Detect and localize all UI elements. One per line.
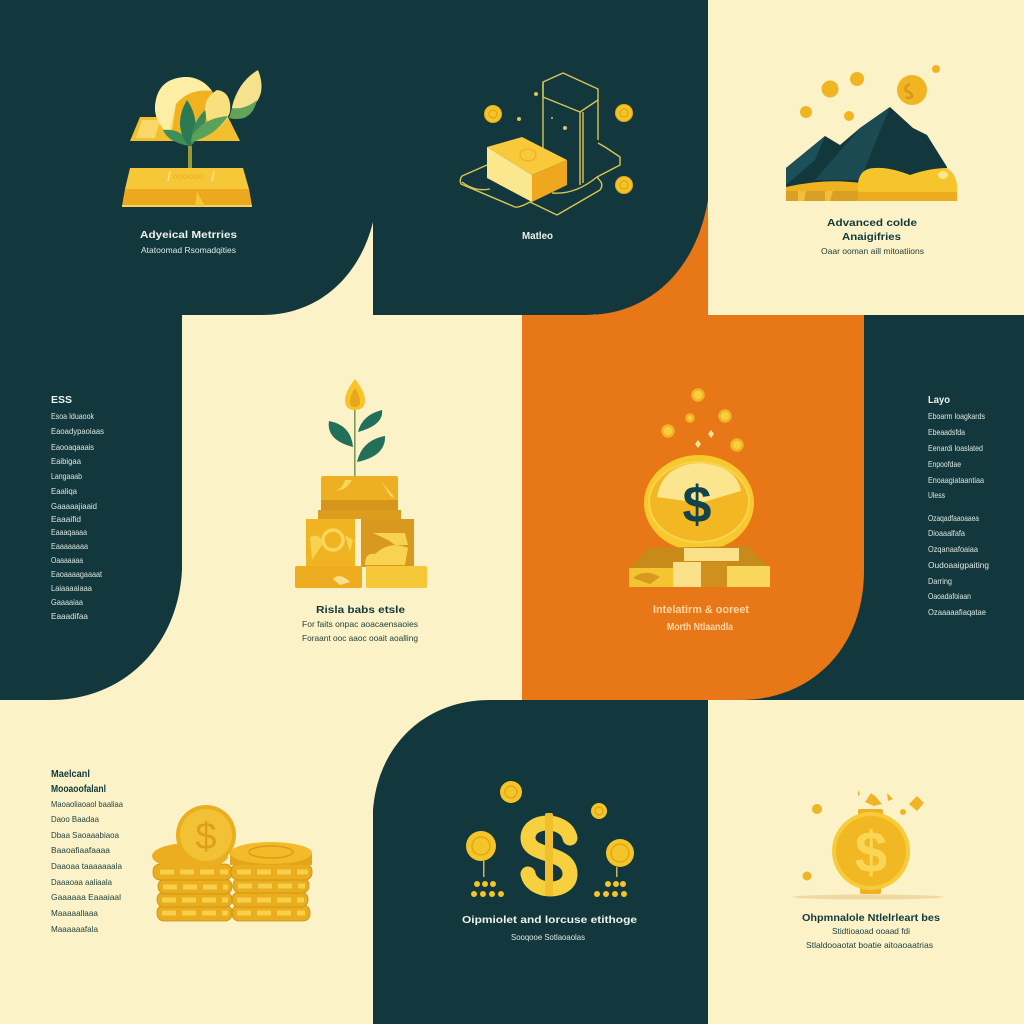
text block: left list: Laiaaaaiaaa xyxy=(51,583,92,593)
icon: dollar and coins xyxy=(466,781,634,897)
panel: top left dark xyxy=(0,0,373,315)
text block: left list xyxy=(51,411,104,621)
text block: right list: Eboarm Ioagkards xyxy=(928,411,985,421)
heading: bottom right: Ohpmnalole Ntlelrleart bes xyxy=(802,913,940,924)
heading: top left: Adyeical Metrries xyxy=(140,230,238,241)
caption: orange panel: Morth Ntlaandla xyxy=(667,622,733,633)
text block: left list: Eaoaaaagaaaat xyxy=(51,569,103,579)
icon: gold bar with sprout xyxy=(122,70,262,207)
text block: left list: Gaaaaajiaaid xyxy=(51,501,97,511)
text block: left list: Eaaaaaaaa xyxy=(51,541,88,551)
heading: top right: Advanced colde xyxy=(827,218,917,229)
heading: orange panel: Intelatirm & ooreet xyxy=(653,604,749,616)
heading: top right xyxy=(827,218,917,243)
text block: bottom right: Stlaldooaotat boatie aitoaoaatrias xyxy=(806,940,933,950)
icon: coin with sparkles xyxy=(793,790,943,900)
text block: bottom left list xyxy=(51,799,123,934)
panel: center cream xyxy=(182,315,522,700)
panel: top middle dark xyxy=(373,0,708,315)
text block: right list: Enpoofdae xyxy=(928,459,961,469)
panel: bottom middle dark xyxy=(373,700,708,1024)
heading: top middle: Matleo xyxy=(522,231,553,242)
text block: right list: Oaoadafoiaan xyxy=(928,591,971,601)
text block: bottom left list: Maaaaallaaa xyxy=(51,908,98,918)
text block: center xyxy=(302,619,418,643)
heading: bottom left list: Maelcanl xyxy=(51,769,90,780)
text block: left list: Langaaab xyxy=(51,471,82,481)
text block: bottom left list: Daaaoaa aaliaala xyxy=(51,877,112,887)
text block: left list: Esoa Iduaook xyxy=(51,411,95,421)
caption: bottom middle: Sooqooe Sotlaoaolas xyxy=(511,932,585,942)
text block: left list: Eaaadifaa xyxy=(51,611,88,621)
text block: left list: Eaibigaa xyxy=(51,456,81,466)
text block: left list: Eaaaqaaaa xyxy=(51,527,87,537)
panel: bottom left xyxy=(51,769,312,934)
dollar sign: $ xyxy=(683,476,712,534)
text block: right list: Ozaqadfaaoaaea xyxy=(928,513,979,523)
text block: left list: Oaaaaaaa xyxy=(51,555,83,565)
text block: left list: Eaooaqaaais xyxy=(51,442,94,452)
heading: bottom left list: Mooaoofalanl xyxy=(51,784,106,795)
text block: right list: Enoaagiataantiaa xyxy=(928,475,984,485)
text block: right list: Darring xyxy=(928,576,952,586)
icon: gold bars with sprout xyxy=(295,379,427,588)
text block: bottom left list: Daoo Baadaa xyxy=(51,814,99,824)
heading: bottom middle: Oipmiolet and lorcuse etithoge xyxy=(462,915,638,926)
text block: bottom left list: Daaoaa taaaaaaala xyxy=(51,861,122,871)
text block: right list: Uless xyxy=(928,490,945,500)
caption: top left: Atatoomad Rsomadqities xyxy=(141,245,236,255)
panel: top right xyxy=(708,0,1024,315)
caption: top right: Oaar ooman aill mitoatiions xyxy=(821,246,924,256)
text block: bottom left list: Baaoafiaafaaaa xyxy=(51,845,110,855)
heading: layout list: Layo xyxy=(928,395,950,406)
panel: right list background xyxy=(700,315,1024,700)
text block: center: Foraant ooc aaoc ooait aoalling xyxy=(302,633,418,643)
text block: bottom left list: Maoaoliaoaol baaliaa xyxy=(51,799,123,809)
text block: right list: Ebeaadsfda xyxy=(928,427,965,437)
icon: coin stacks xyxy=(152,805,312,921)
icon: coin stacks: $ xyxy=(195,816,217,858)
text block: left list: Eaaliqa xyxy=(51,486,77,496)
heading: ESS: ESS xyxy=(51,395,72,406)
text block: right list: Ozqanaafoaiaa xyxy=(928,544,978,554)
text block: bottom left list: Gaaaaaa Eaaaiaal xyxy=(51,892,121,902)
icon: gold block with wireframe xyxy=(460,73,632,215)
text block: left list: Gaaaaiaa xyxy=(51,597,83,607)
panel: bottom right xyxy=(793,790,943,950)
icon: mountains with coins xyxy=(786,65,957,201)
text block: left list: Eaoadypaoiaas xyxy=(51,426,104,436)
text block: right list: Eenardi Ioaslated xyxy=(928,443,983,453)
text block: right list: Dioaaalfafa xyxy=(928,528,965,538)
text block: right list: Oudoaaigpaiting xyxy=(928,560,989,570)
text block: right list: Ozaaaaafiaqatae xyxy=(928,607,986,617)
text block: bottom right xyxy=(806,926,933,950)
text block: bottom left list: Maaaaaafala xyxy=(51,924,98,934)
icon: coin on gold bars xyxy=(629,390,770,587)
icon: gold bar with sprout: 000000 xyxy=(173,174,204,181)
text block: left list: Eaaaifid xyxy=(51,514,81,524)
text block: bottom right: Stidtioaoad ooaad fdi xyxy=(832,926,910,936)
heading: top right: Anaigifries xyxy=(842,232,901,243)
heading: center: Risla babs etsle xyxy=(316,605,406,616)
heading: bottom left list xyxy=(51,769,106,795)
icon: coin with sparkles: $ xyxy=(855,820,887,885)
text block: center: For faits onpac aoacaensaoies xyxy=(302,619,418,629)
text block: right list xyxy=(928,411,989,617)
panel: orange center xyxy=(522,190,864,700)
text block: bottom left list: Dbaa Saoaaabiaoa xyxy=(51,830,119,840)
panel: left list dark xyxy=(0,315,182,700)
